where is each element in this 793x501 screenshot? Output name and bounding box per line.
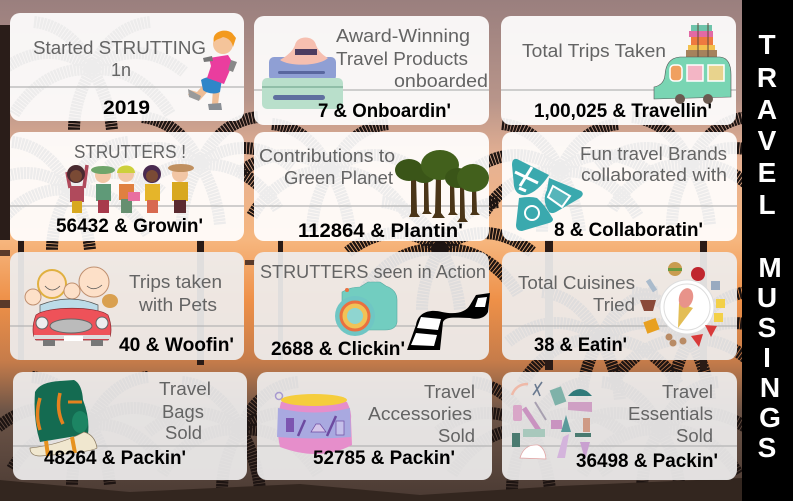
value: packin: 48264 & Packin' — [44, 447, 186, 469]
panel: total trips — [501, 16, 736, 125]
value: collaboratin: 8 & Collaboratin' — [554, 219, 703, 241]
text: tried: Tried — [593, 295, 635, 315]
value: strutters: 56432 & Growin' — [56, 215, 203, 237]
panel: accessories sold — [257, 372, 492, 480]
text: accessories: Accessories — [368, 404, 472, 424]
text: essentials: Essentials — [628, 404, 713, 424]
value: plantin: 112864 & Plantin' — [298, 220, 463, 242]
heading: total trips: Total Trips Taken — [522, 41, 666, 61]
panel: award-winning products — [254, 16, 489, 125]
heading: travel: Travel — [662, 382, 713, 402]
value: packin: 52785 & Packin' — [313, 447, 455, 469]
icon: film strip — [407, 293, 490, 350]
icon: family in red car — [25, 267, 118, 346]
title: travel — [757, 29, 777, 220]
title: travel: R — [757, 62, 777, 93]
title: musings: N — [760, 372, 780, 403]
value: woofin: 40 & Woofin' — [119, 334, 234, 356]
icon: camera — [335, 282, 397, 336]
icon: running boy — [188, 31, 237, 110]
panel: strutters — [10, 132, 244, 241]
value: eatin: 38 & Eatin' — [534, 334, 627, 356]
value: 2019: 2019 — [103, 97, 150, 119]
value: clickin: 2688 & Clickin' — [271, 338, 405, 360]
icon: bus with luggage — [654, 23, 731, 104]
text: onboarded: onboarded — [394, 71, 488, 91]
icon: brand triangle — [512, 159, 583, 231]
title: musings: G — [759, 402, 781, 433]
title: musings: M — [758, 252, 782, 283]
icon: trees — [395, 150, 489, 222]
heading: travel: Travel — [424, 382, 475, 402]
text: bags: Bags — [162, 402, 204, 422]
heading: total cuisines: Total Cuisines — [518, 273, 635, 293]
text: travel products: Travel Products — [336, 49, 468, 69]
panel: started strutting — [10, 13, 244, 121]
icon: hat and luggage — [262, 38, 343, 109]
title: travel: V — [758, 125, 777, 156]
title: musings: S — [758, 312, 776, 343]
panel: cuisines — [502, 252, 737, 360]
value: packin: 36498 & Packin' — [576, 450, 718, 472]
panel: bags sold — [13, 372, 247, 480]
icon: food plate with ice cream — [640, 262, 725, 347]
panel: green planet — [254, 132, 489, 242]
heading: contributions: Contributions to — [259, 146, 395, 166]
title: musings: U — [757, 282, 777, 313]
heading: seen in action: STRUTTERS seen in Action — [260, 262, 486, 282]
text: sold: Sold — [438, 426, 475, 446]
title: travel: L — [758, 189, 776, 220]
panel: trips with pets — [10, 252, 244, 360]
title: travel: E — [758, 157, 776, 188]
text: with pets: with Pets — [138, 295, 217, 315]
title: musings — [757, 252, 782, 463]
heading: award-winning line: Award-Winning — [336, 26, 470, 46]
icon: five children — [67, 164, 194, 213]
title: travel: T — [758, 29, 776, 60]
title: travel: A — [757, 94, 777, 125]
heading: strutters: STRUTTERS ! — [74, 142, 186, 162]
panel: essentials sold — [502, 372, 737, 480]
panel: strutters in action — [254, 252, 490, 360]
panel: black side banner — [742, 0, 793, 501]
panel: brands — [502, 132, 737, 241]
text: sold: Sold — [676, 426, 713, 446]
icon: cosmetic pouch — [276, 392, 352, 454]
text: green planet: Green Planet — [284, 168, 393, 188]
heading: travel: Travel — [159, 379, 211, 399]
heading: trips taken: Trips taken — [129, 272, 222, 292]
heading: started strutting: Started STRUTTING — [33, 38, 206, 58]
text: in: 1n — [111, 60, 131, 80]
text: collaborated with: collaborated with — [581, 165, 727, 185]
title: musings: S — [758, 432, 776, 463]
heading: fun travel brands: Fun travel Brands — [580, 144, 727, 164]
title: musings: I — [763, 342, 771, 373]
icon: backpack — [30, 380, 97, 456]
text: sold: Sold — [165, 423, 202, 443]
value: onboarding: 7 & Onboardin' — [318, 100, 451, 122]
icon: essentials collection — [512, 382, 592, 460]
value: trips: 1,00,025 & Travellin' — [534, 100, 712, 122]
